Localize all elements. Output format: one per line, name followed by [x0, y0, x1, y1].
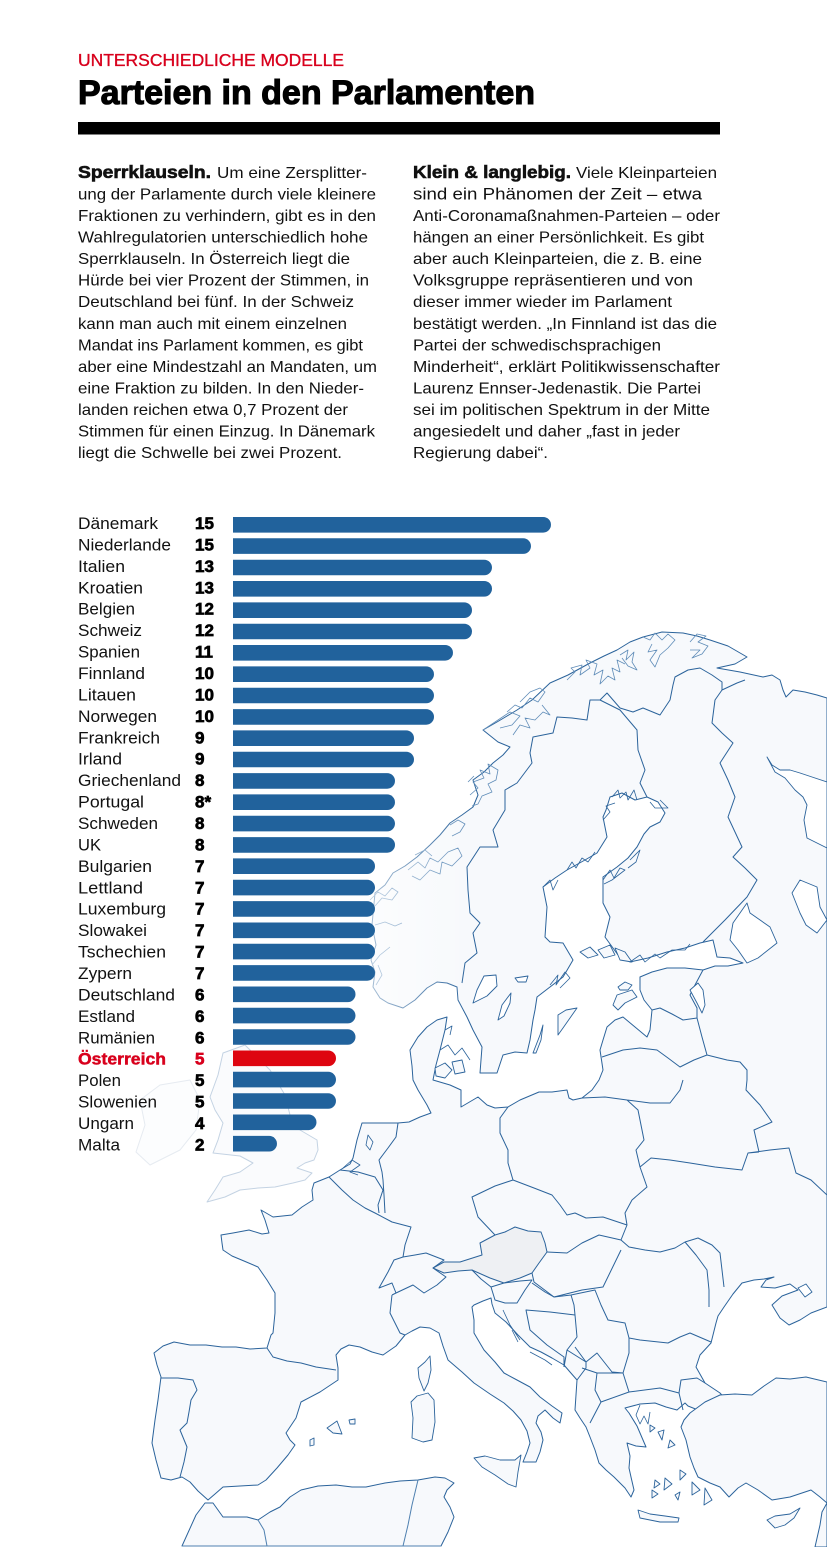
text block: Sperrklauseln: Stimmen für einen Einzug. In Dänemark — [78, 424, 376, 440]
value labels — [195, 514, 214, 1154]
value labels: 15 — [195, 514, 214, 533]
text block: Klein und langlebig: sind ein Phänomen der Zeit – etwa — [413, 184, 703, 204]
island: Gotland — [558, 1008, 577, 1035]
value labels: 13 — [195, 578, 214, 597]
country labels: Belgien — [78, 601, 135, 619]
country labels: Dänemark — [78, 515, 159, 533]
islands and lakes of the Baltic region — [435, 757, 827, 1297]
country labels: Norwegen — [78, 708, 157, 726]
lake: Peipus — [690, 983, 705, 1013]
value labels: 8* — [195, 793, 211, 812]
text block: Klein und langlebig: angesiedelt und daher „fast in jeder — [413, 424, 681, 440]
value labels: 15 — [195, 535, 214, 554]
landmass: Scandinavia and continental Europe — [152, 632, 827, 1500]
country labels: Estland — [78, 1008, 135, 1026]
country labels: Kroatien — [78, 579, 143, 597]
value labels: 5 — [195, 1071, 204, 1090]
map of Europe — [136, 632, 827, 1547]
value labels: 11 — [195, 643, 213, 662]
Sea of Azov — [798, 1284, 812, 1297]
value labels: 7 — [195, 943, 204, 962]
country labels: Schweden — [78, 815, 158, 833]
country labels: Frankreich — [78, 729, 160, 747]
Norwegian coast fjords and islands — [370, 633, 708, 985]
text block: Sperrklauseln: Sperrklauseln. — [78, 162, 211, 182]
borders: northern Europe — [462, 668, 772, 1152]
country labels: Litauen — [78, 686, 136, 704]
text block: Klein und langlebig: Klein & langlebig. — [413, 162, 571, 182]
text block: Sperrklauseln: Deutschland bei fünf. In der Schweiz — [78, 294, 354, 311]
value labels: 6 — [195, 1007, 204, 1026]
bar: Oesterreich highlighted — [233, 1050, 336, 1066]
text block: Klein und langlebig: bestätigt werden. „In Finnland ist das die — [413, 316, 717, 333]
text block: Klein und langlebig: dieser immer wieder im Parlament — [413, 294, 673, 311]
island: Hiiumaa — [618, 982, 632, 990]
island: Saaremaa — [613, 990, 637, 1010]
text block: Sperrklauseln: Mandat ins Parlament kommen, es gibt — [78, 337, 364, 354]
value labels: 10 — [195, 707, 214, 726]
country labels: Slowakei — [78, 922, 147, 940]
value labels: 5 — [195, 1093, 204, 1112]
text block: Klein und langlebig: Laurenz Ennser-Jedenastik. Die Partei — [413, 380, 701, 397]
landmass: Turkey — [681, 1377, 827, 1503]
country labels: Ungarn — [78, 1115, 134, 1133]
Mediterranean islands — [310, 1310, 800, 1528]
text block: Klein und langlebig — [413, 162, 721, 462]
text block: Sperrklauseln: aber eine Mindestzahl an Mandaten, um — [78, 359, 377, 376]
value labels: 7 — [195, 857, 204, 876]
text block: Klein und langlebig: hängen an einer Persönlichkeit. Es gibt — [413, 230, 705, 247]
borders: central Europe — [472, 1080, 827, 1307]
islands: Aland — [580, 945, 632, 962]
value labels: 7 — [195, 921, 204, 940]
value labels: 7 — [195, 900, 204, 919]
landmass: Near East edge — [815, 1503, 827, 1547]
value labels: 8 — [195, 814, 204, 833]
text block: Klein und langlebig: Anti-Coronamaßnahmen-Parteien – oder — [413, 208, 721, 225]
text block: Klein und langlebig: sei im politischen Spektrum in der Mitte — [413, 402, 710, 419]
borders: southern Europe and Balkans — [472, 1270, 711, 1423]
title: Parteien in den Parlamenten — [78, 74, 535, 112]
text block: Klein und langlebig: aber auch Kleinparteien, die z. B. eine — [413, 251, 702, 268]
island: Cyprus — [767, 1508, 800, 1528]
text block: Sperrklauseln: liegt die Schwelle bei zwei Prozent. — [78, 445, 342, 462]
title rule — [78, 122, 720, 134]
value labels: 10 — [195, 685, 214, 704]
text block: Sperrklauseln — [78, 162, 377, 462]
lake: Onega — [792, 880, 827, 933]
Greek and Adriatic coast details — [503, 1310, 650, 1424]
value labels: 12 — [195, 600, 214, 619]
country labels: Irland — [78, 751, 122, 769]
text block: Klein und langlebig: Regierung dabei“. — [413, 445, 548, 462]
White Sea — [767, 757, 827, 848]
lake: Ladoga — [730, 903, 777, 963]
North Africa borders and bottom edge — [182, 1480, 441, 1546]
country labels: Rumänien — [78, 1029, 155, 1047]
bars — [233, 517, 551, 1152]
country labels: Finnland — [78, 665, 145, 683]
country labels: Deutschland — [78, 986, 175, 1004]
value labels: 7 — [195, 878, 204, 897]
country labels: Portugal — [78, 794, 144, 812]
landmass: North Africa — [182, 1477, 454, 1546]
country labels: Schweiz — [78, 622, 142, 640]
Danish islands — [435, 1060, 465, 1078]
country: Austria — [433, 1227, 547, 1283]
value labels: 8 — [195, 771, 204, 790]
country labels: Zypern — [78, 965, 132, 983]
country labels: Österreich — [78, 1050, 166, 1069]
island: Crete — [638, 1510, 679, 1522]
country labels: Spanien — [78, 644, 140, 662]
country labels: Luxemburg — [78, 901, 166, 919]
text block: Klein und langlebig: Partei der schwedischsprachigen — [413, 337, 661, 354]
text block: Klein und langlebig: Minderheit“, erklärt Politikwissenschafter — [413, 359, 721, 376]
Baltic coast teeth — [343, 790, 690, 1175]
text block: Sperrklauseln: ung der Parlamente durch viele kleinere — [78, 186, 376, 204]
value labels: 9 — [195, 728, 204, 747]
country labels: Slowenien — [78, 1094, 157, 1112]
value labels: 12 — [195, 621, 214, 640]
text block: Klein und langlebig: Viele Kleinparteien — [576, 165, 717, 182]
value labels: 5 — [195, 1050, 204, 1069]
text block: Sperrklauseln: eine Fraktion zu bilden. In den Nieder- — [78, 380, 364, 397]
island: Corsica — [418, 1356, 431, 1391]
country labels: Griechenland — [78, 772, 181, 790]
text block: Sperrklauseln: kann man auch mit einem einzelnen — [78, 316, 347, 333]
value labels: 6 — [195, 985, 204, 1004]
island: Sardinia — [411, 1393, 435, 1442]
value labels: 7 — [195, 964, 204, 983]
value labels: 8 — [195, 835, 204, 854]
bar chart — [78, 514, 551, 1154]
lake: Vaettern — [498, 993, 511, 1020]
lake: Maelaren — [515, 976, 528, 982]
country labels: Malta — [78, 1136, 121, 1154]
island: Oeland — [533, 1025, 543, 1053]
country labels: Bulgarien — [78, 858, 152, 876]
value labels: 10 — [195, 664, 214, 683]
text block: Sperrklauseln: Fraktionen zu verhindern, gibt es in den — [78, 208, 376, 225]
text block: Sperrklauseln: Wahlregulatorien unterschiedlich hohe — [78, 230, 368, 247]
value labels: 9 — [195, 750, 204, 769]
text block: Sperrklauseln: Um eine Zersplitter- — [217, 165, 367, 182]
kicker: UNTERSCHIEDLICHE MODELLE — [78, 50, 344, 70]
country labels: Tschechien — [78, 944, 166, 962]
country labels: Niederlande — [78, 536, 171, 554]
landmass: Great Britain — [207, 1045, 318, 1202]
text block: Klein und langlebig: Volksgruppe repräsentieren und von — [413, 273, 693, 290]
country labels — [78, 515, 181, 1154]
borders: western Europe — [161, 1123, 460, 1477]
value labels: 4 — [195, 1114, 205, 1133]
landmass: Ireland — [136, 1080, 200, 1165]
text block: Sperrklauseln: Hürde bei vier Prozent der Stimmen, in — [78, 273, 369, 290]
country labels: Polen — [78, 1072, 121, 1090]
value labels: 2 — [195, 1135, 204, 1154]
island: Sicily — [474, 1455, 521, 1487]
text block: Sperrklauseln: Sperrklauseln. In Österreich liegt die — [78, 250, 350, 268]
value labels: 6 — [195, 1028, 204, 1047]
text block: Sperrklauseln: landen reichen etwa 0,7 Prozent der — [78, 402, 349, 419]
country labels: Lettland — [78, 879, 143, 897]
country labels: UK — [78, 836, 101, 854]
islands: Balearics — [310, 1419, 355, 1446]
fade over western Scandinavia — [350, 625, 470, 1010]
Aegean islands — [650, 1425, 712, 1505]
country labels: Italien — [78, 558, 125, 576]
lake: Vaenern — [473, 975, 497, 1003]
value labels: 13 — [195, 557, 214, 576]
